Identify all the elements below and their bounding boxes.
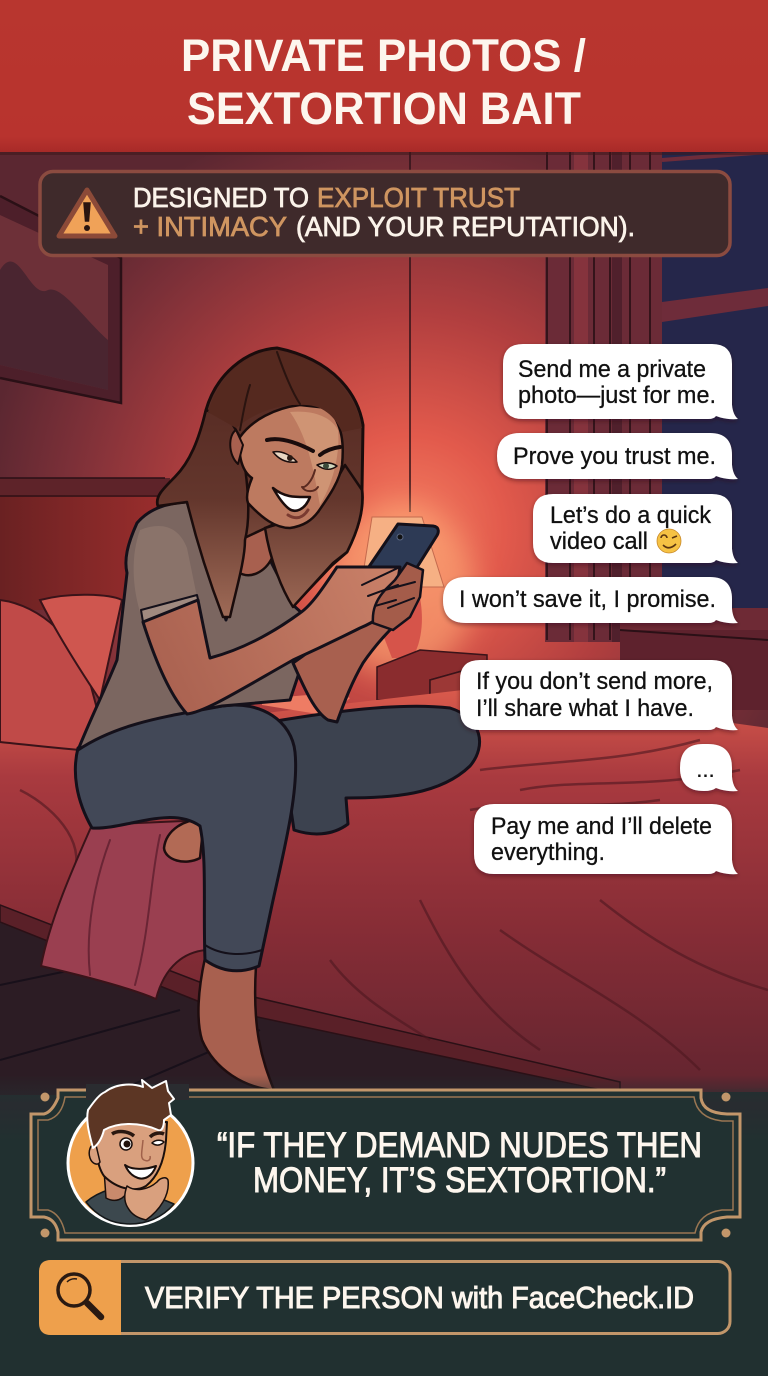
- call to action bar: [39, 1260, 730, 1335]
- icon: magnifying glass: [58, 1274, 101, 1317]
- warning text: (AND YOUR REPUTATION).: [296, 211, 635, 242]
- bubble 5: [460, 660, 738, 730]
- t-shirt: [78, 502, 315, 750]
- bubble 5: If you don’t send more,: [476, 668, 713, 695]
- woman on the bed with a phone: [41, 348, 480, 1090]
- bubble 3: Let’s do a quick: [550, 502, 712, 529]
- quote text: [217, 1126, 702, 1200]
- hair lock left: [157, 410, 248, 617]
- bubble 3: video call: [550, 528, 648, 555]
- lamp and nightstand: [325, 505, 487, 712]
- avatar: man thinking: [68, 1080, 193, 1226]
- title: [181, 30, 586, 134]
- title: PRIVATE PHOTOS /: [181, 30, 586, 81]
- far hand: [373, 563, 423, 630]
- bubble 3: [533, 494, 738, 563]
- bed: [0, 688, 768, 1094]
- bubble 7: everything.: [491, 839, 605, 866]
- warning text: [133, 182, 635, 242]
- hanging blanket: [41, 820, 206, 999]
- tucked foot: [164, 820, 204, 862]
- hair top: [208, 350, 362, 432]
- bubble 1: photo—just for me.: [518, 382, 716, 409]
- chat bubbles: [443, 344, 738, 874]
- floor: [0, 900, 620, 1095]
- header banner: [0, 0, 768, 155]
- warning text: EXPLOIT TRUST: [317, 182, 520, 213]
- icon: winking emoji: [657, 529, 681, 553]
- bubble 4: [443, 577, 738, 623]
- warning text: + INTIMACY: [133, 211, 287, 242]
- eyes and brows: [267, 439, 340, 455]
- lower foot: [198, 958, 274, 1090]
- pillows: [0, 595, 122, 752]
- night window: [620, 152, 768, 710]
- bedroom scene background: [0, 152, 768, 1095]
- framed painting: [0, 196, 121, 403]
- bubble 5: I’ll share what I have.: [476, 695, 694, 722]
- bubble 7: Pay me and I’ll delete: [491, 813, 712, 840]
- hair lock right: [265, 465, 362, 607]
- nose: [302, 470, 318, 491]
- warning banner: [40, 172, 730, 256]
- hair back: [157, 348, 363, 620]
- smile: [273, 488, 310, 511]
- title: SEXTORTION BAIT: [187, 83, 581, 134]
- near leg: [75, 705, 296, 971]
- neck: [238, 525, 272, 575]
- far leg: [270, 706, 480, 834]
- curtains: [545, 152, 663, 642]
- quote text: “IF THEY DEMAND NUDES THEN: [217, 1126, 702, 1165]
- icon: warning triangle: [59, 190, 115, 236]
- bottom fade: [0, 1075, 768, 1140]
- warning text: DESIGNED TO: [133, 182, 309, 213]
- bubble 1: Send me a private: [518, 356, 706, 383]
- far arm: [293, 610, 392, 722]
- phone: [364, 524, 438, 588]
- face: [239, 405, 343, 528]
- quote panel: [31, 1080, 740, 1240]
- quote text: MONEY, IT’S SEXTORTION.”: [253, 1161, 666, 1200]
- bubble 7: [474, 804, 738, 874]
- bubble 1: [503, 344, 738, 419]
- headboard: [0, 478, 170, 610]
- ear: [230, 430, 243, 464]
- bubble 6: [680, 744, 738, 791]
- bubble 2: [497, 433, 738, 479]
- bubble 2: Prove you trust me.: [513, 443, 716, 470]
- bubble 6: ...: [697, 762, 714, 781]
- fingers: [362, 567, 415, 608]
- bubble 4: I won’t save it, I promise.: [459, 586, 716, 613]
- call to action text: VERIFY THE PERSON with FaceCheck.ID: [145, 1280, 694, 1315]
- near arm and hand: [143, 567, 400, 714]
